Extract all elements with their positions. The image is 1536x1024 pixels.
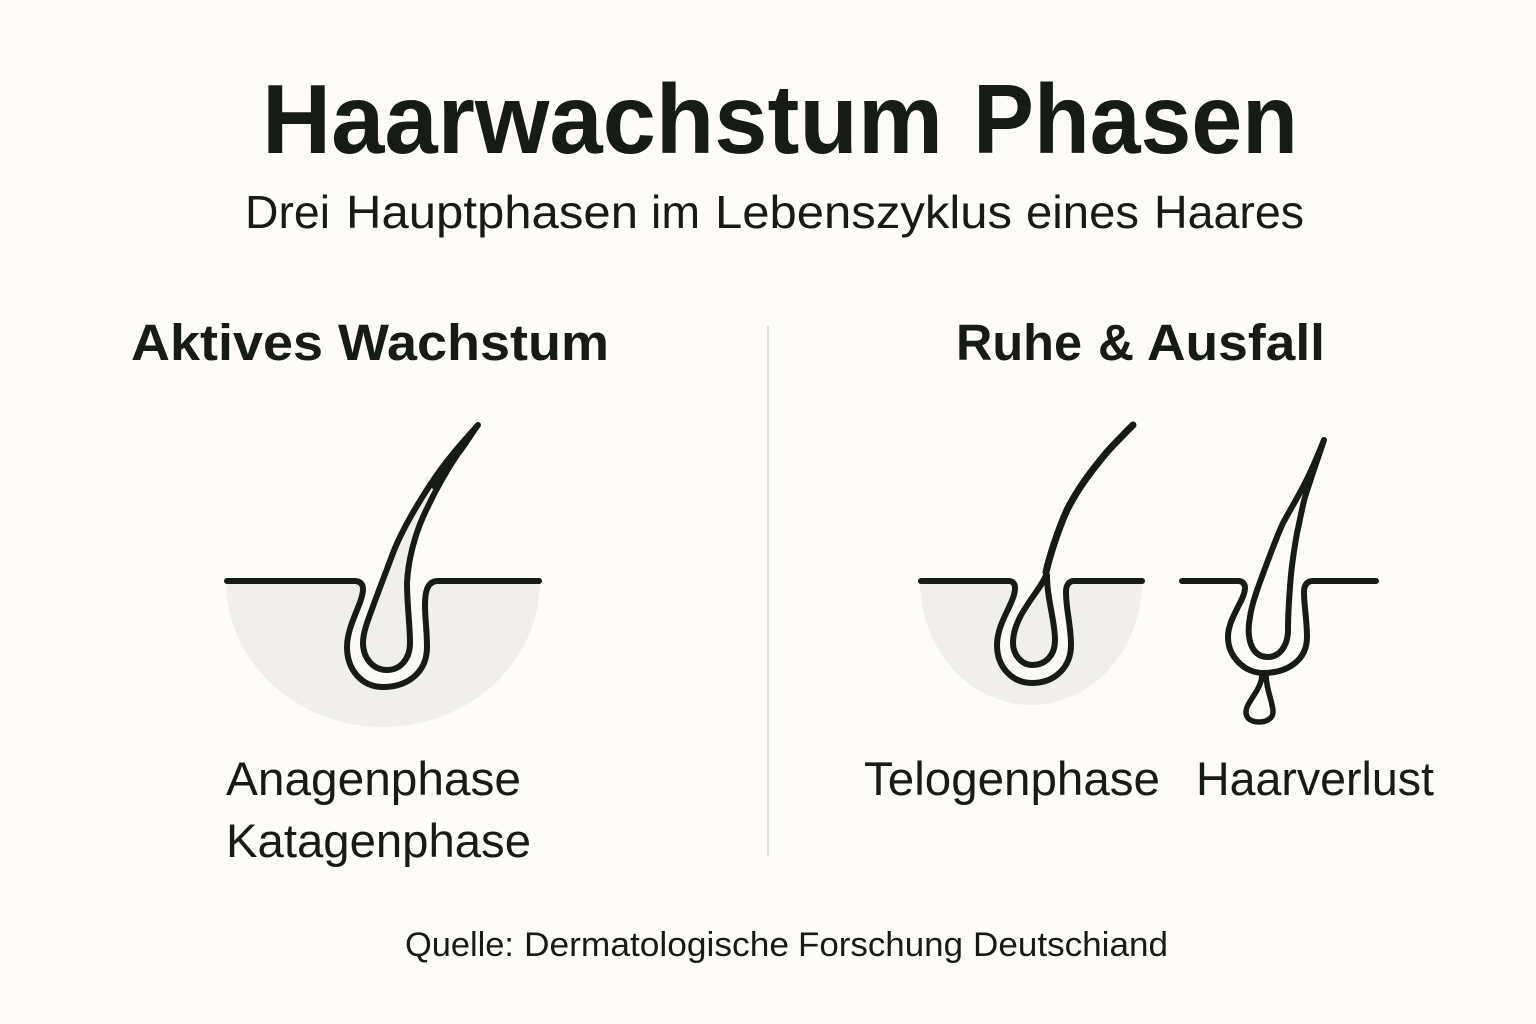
source note: Forschung bbox=[798, 926, 963, 964]
title: Phasen bbox=[973, 64, 1298, 174]
source note bbox=[405, 926, 1168, 964]
subtitle: eines bbox=[1026, 186, 1139, 238]
heading: Ruhe &amp; Ausfall: & bbox=[1098, 314, 1134, 371]
subtitle: im bbox=[651, 186, 700, 238]
icon: hair loss follicle with drop bbox=[1182, 440, 1376, 722]
heading: Ruhe &amp; Ausfall bbox=[956, 314, 1325, 371]
title bbox=[262, 64, 1298, 174]
label: Telogenphase: Telogenphase bbox=[864, 752, 1160, 805]
subtitle: Lebenszyklus bbox=[715, 186, 1012, 238]
heading: Ruhe &amp; Ausfall: Ausfall bbox=[1147, 314, 1325, 371]
subtitle: Haares bbox=[1154, 186, 1304, 238]
heading: Aktives Wachstum: Aktives bbox=[131, 314, 323, 371]
subtitle bbox=[245, 186, 1304, 238]
subtitle: Hauptphasen bbox=[346, 186, 638, 238]
source note: Quelle: bbox=[405, 926, 514, 964]
source note: Deutschiand bbox=[973, 926, 1168, 964]
heading: Aktives Wachstum: Wachstum bbox=[338, 314, 609, 371]
icon: anagen hair follicle bbox=[226, 425, 540, 727]
divider bbox=[767, 326, 769, 856]
label: Haarverlust: Haarverlust bbox=[1196, 752, 1434, 805]
heading: Aktives Wachstum bbox=[131, 314, 609, 371]
title: Haarwachstum bbox=[262, 64, 943, 174]
heading: Ruhe &amp; Ausfall: Ruhe bbox=[956, 314, 1082, 371]
label: Katagenphase: Katagenphase bbox=[226, 814, 531, 867]
icon: telogen hair follicle bbox=[920, 425, 1142, 705]
label: Anagenphase: Anagenphase bbox=[226, 752, 521, 805]
source note: Dermatologische bbox=[524, 926, 789, 964]
subtitle: Drei bbox=[245, 186, 330, 238]
